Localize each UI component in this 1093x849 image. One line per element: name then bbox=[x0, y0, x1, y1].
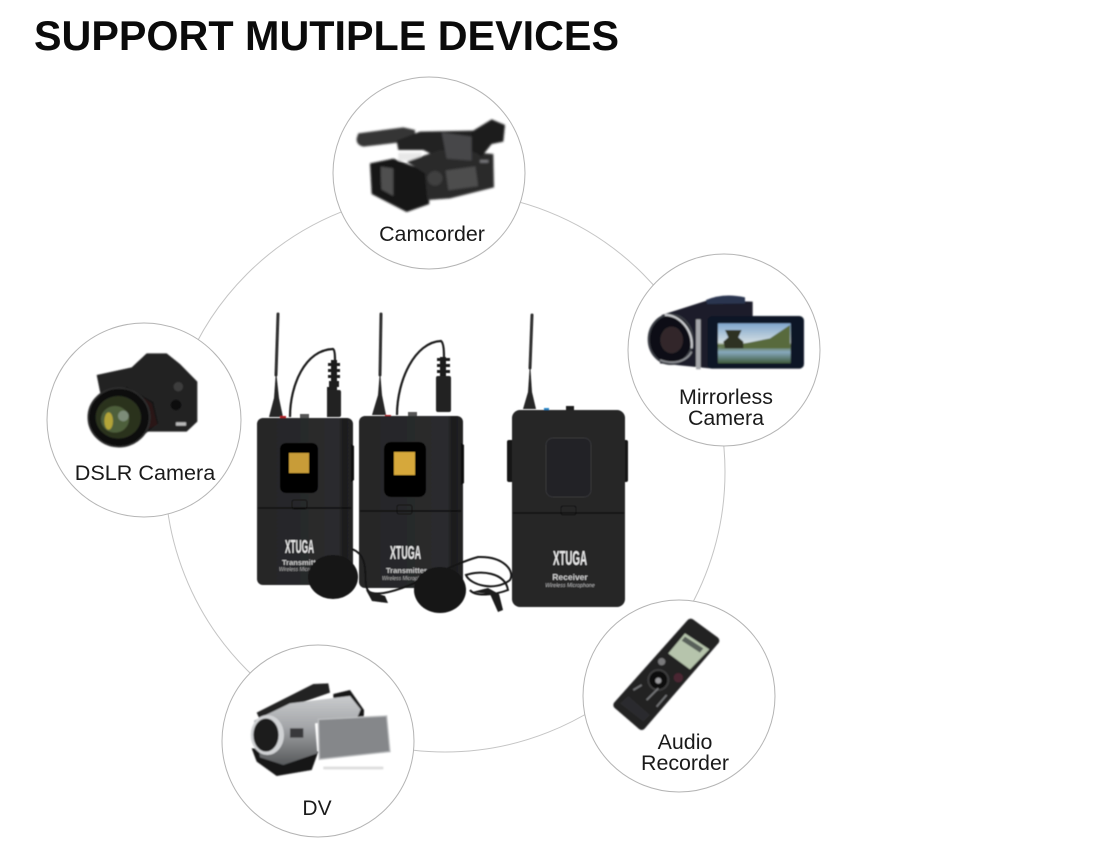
label: camcorder: Camcorder bbox=[379, 222, 485, 246]
title: SUPPORT MUTIPLE DEVICES bbox=[34, 12, 619, 59]
label: audio recorder: Recorder bbox=[641, 751, 729, 775]
receiver: Wireless Microphone bbox=[545, 583, 595, 589]
connecting ring bbox=[165, 192, 725, 752]
transmitter 2: XTUGA bbox=[390, 543, 421, 563]
panel: audio recorder bbox=[583, 600, 775, 792]
lavalier clips bbox=[366, 588, 503, 612]
panel: mirrorless camera bbox=[628, 254, 820, 446]
label: DSLR camera: DSLR Camera bbox=[75, 460, 216, 485]
icon: DV camera bbox=[251, 683, 390, 776]
icon: audio recorder bbox=[617, 623, 715, 726]
label: mirrorless camera: Mirrorless bbox=[679, 385, 773, 409]
transmitter 2 bbox=[359, 314, 464, 588]
lavalier foam mic 2 bbox=[414, 567, 466, 613]
lavalier foam mic 1 bbox=[308, 555, 358, 599]
icon: DSLR camera bbox=[88, 353, 197, 447]
transmitter 1: XTUGA bbox=[285, 537, 314, 557]
label: mirrorless camera: Camera bbox=[688, 406, 764, 430]
transmitter 2: Transmitter bbox=[386, 566, 427, 575]
label: mirrorless camera bbox=[679, 385, 773, 430]
transmitter 1: Wireless Microphone bbox=[279, 567, 326, 573]
transmitter 2: Wireless Microphone bbox=[382, 576, 429, 582]
transmitter 1: Transmitter bbox=[282, 558, 323, 567]
icon: camcorder bbox=[357, 119, 505, 212]
icon: mirrorless camera bbox=[649, 296, 804, 369]
label: audio recorder bbox=[641, 730, 729, 775]
panel: DV bbox=[222, 645, 414, 837]
lavalier cable bbox=[352, 549, 511, 595]
label: audio recorder: Audio bbox=[658, 730, 712, 754]
transmitter 1 bbox=[257, 314, 354, 585]
receiver bbox=[507, 315, 628, 607]
receiver: XTUGA bbox=[553, 548, 587, 570]
panel: DSLR camera bbox=[47, 323, 241, 517]
receiver: Receiver bbox=[552, 572, 588, 582]
label: DV: DV bbox=[302, 797, 332, 820]
panel: camcorder bbox=[333, 77, 525, 269]
wireless microphone set bbox=[257, 314, 628, 613]
